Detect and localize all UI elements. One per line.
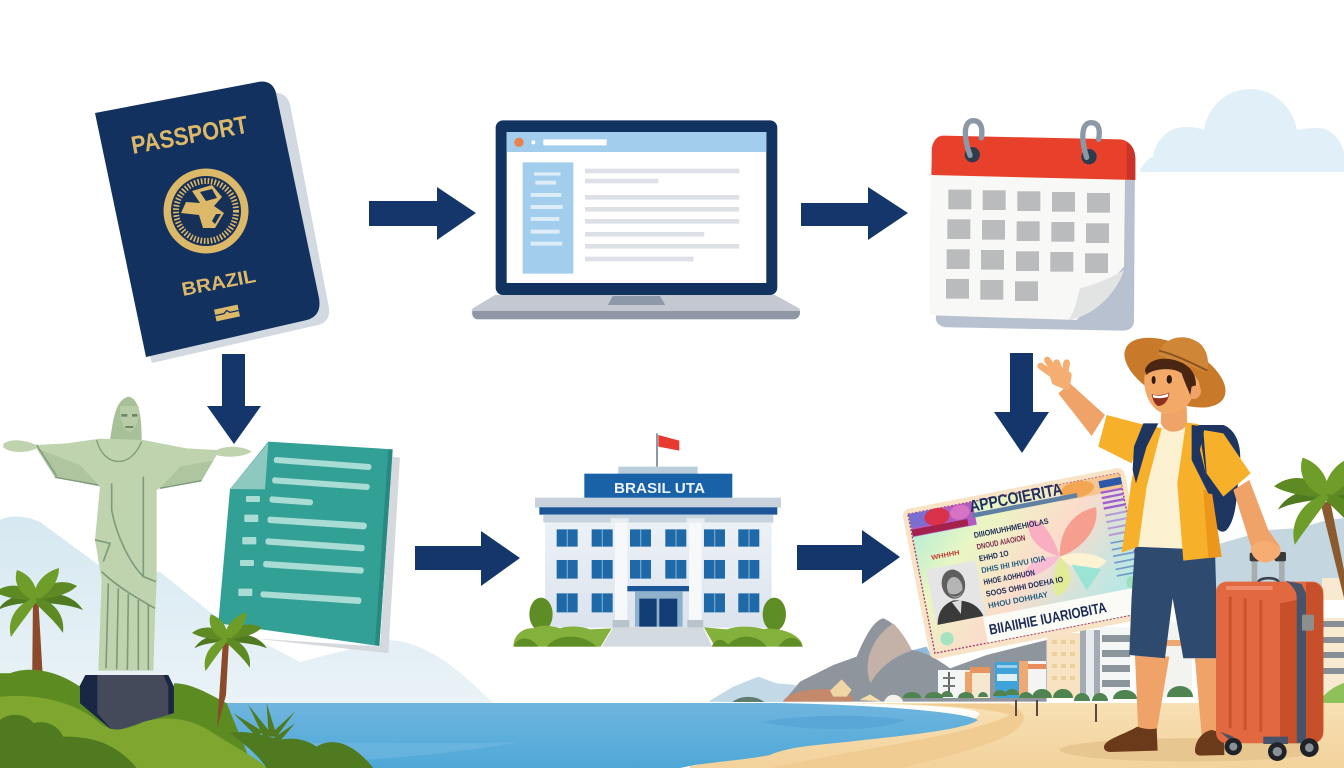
watermark fan — [1011, 507, 1111, 602]
entrance — [627, 586, 689, 627]
head — [1144, 359, 1201, 414]
background: sand beach — [690, 703, 1344, 768]
Christ the Redeemer statue — [3, 397, 252, 732]
personal data text: EHHD 1O — [978, 549, 1009, 563]
spiky shrub — [233, 703, 295, 743]
suitcase — [1216, 541, 1323, 761]
second palm tree — [192, 612, 267, 728]
hat crown — [1157, 337, 1208, 373]
consulate building — [513, 433, 803, 647]
calendar rings — [965, 121, 1099, 164]
statue pedestal — [79, 675, 174, 732]
wheels — [1220, 732, 1319, 761]
red field label: WHHHH — [931, 549, 960, 562]
background: distant blue hill on the right — [1205, 518, 1344, 600]
shrubs and topiary — [513, 598, 803, 647]
left palm tree — [0, 568, 83, 698]
shorts — [1129, 547, 1218, 658]
passport photo — [926, 561, 986, 625]
machine readable band: BIIAIIHIE IUARIOBITA — [988, 600, 1108, 639]
background: cloud — [1140, 89, 1344, 172]
personal data text: HHOU DOHHIAY — [987, 590, 1049, 610]
backpack straps — [1133, 423, 1223, 497]
background: left mountains — [0, 516, 493, 703]
sidebar — [523, 162, 573, 274]
suitcase clasp — [1302, 615, 1314, 631]
application form document — [218, 442, 400, 653]
building sign: BRASIL UTA — [614, 481, 705, 497]
hand on handle — [1251, 541, 1281, 563]
background: sea with foam — [226, 702, 979, 768]
hills — [0, 670, 373, 768]
stripe column — [1098, 477, 1139, 577]
arrow: consulate to visa — [797, 530, 900, 584]
down arm — [1233, 480, 1280, 561]
passport emblem — [164, 168, 248, 254]
personal data text: SOOS OHHI DOEHA IO — [985, 575, 1064, 599]
flag — [656, 433, 679, 467]
ground shadow — [1060, 738, 1320, 762]
legs — [1135, 655, 1220, 735]
visa card — [902, 467, 1153, 660]
passport country: BRAZIL — [180, 266, 258, 301]
yellow overshirt — [1098, 415, 1251, 561]
suitcase handle — [1250, 552, 1286, 583]
security pattern top right — [970, 473, 1122, 519]
personal data text — [973, 516, 1066, 611]
raised arm — [1058, 383, 1105, 436]
arrow: passport down to form — [207, 354, 261, 444]
calendar date grid — [946, 190, 1110, 301]
building sign — [584, 474, 732, 499]
passport title: PASSPORT — [129, 111, 250, 160]
right palm tree — [1274, 455, 1344, 598]
background: city skyline — [938, 578, 1344, 723]
traveler — [1041, 323, 1320, 762]
front steps — [602, 627, 712, 647]
passport — [95, 82, 329, 363]
background: trees on the promenade — [903, 686, 1193, 722]
t-shirt — [1137, 423, 1185, 548]
visa title: APPCOIERITA — [968, 479, 1064, 516]
arrow: laptop to calendar — [801, 187, 908, 240]
arrow: calendar down to visa — [994, 353, 1049, 453]
hat brim — [1114, 323, 1236, 422]
backpack — [1192, 425, 1240, 532]
arrow: form to consulate — [415, 531, 520, 586]
passport chip icon — [214, 305, 240, 321]
calendar — [929, 121, 1135, 331]
security pattern top left — [908, 501, 977, 537]
shoes — [1104, 727, 1224, 756]
personal data text: DIIIOMUHHMEHIOLAS — [973, 516, 1050, 540]
background: sugarloaf mountains — [708, 618, 1047, 703]
personal data text: DNOUD AIAOION — [976, 533, 1026, 552]
page text lines — [585, 169, 739, 261]
waving hand — [1041, 360, 1068, 387]
neck — [1161, 407, 1187, 432]
laptop: online application — [472, 120, 800, 319]
personal data text: HHOE AOHHUON — [983, 568, 1036, 587]
arrow: passport to laptop — [369, 187, 476, 240]
personal data text: DHIS IHI IHVU IOIA — [981, 554, 1047, 575]
windows — [557, 529, 759, 612]
browser bar — [507, 132, 766, 152]
